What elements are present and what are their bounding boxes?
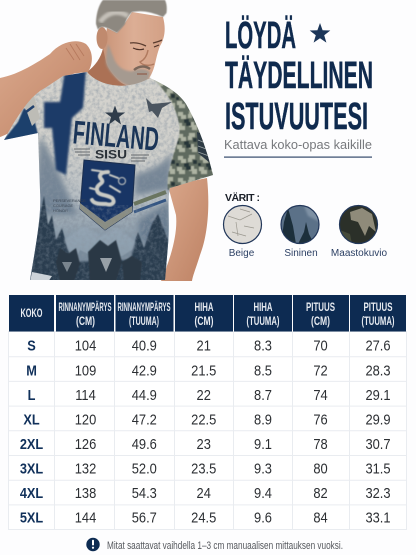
length cm column: 70 (313, 337, 328, 354)
size column: 4XL (20, 484, 44, 501)
header labels: (TUUMA) (362, 316, 395, 328)
sleeve cm column: 21 (197, 337, 211, 354)
size column: S (27, 336, 36, 354)
header labels: RINNANYMPÄRYS (118, 301, 171, 314)
size table (8, 295, 406, 530)
size column: 5XL (20, 508, 44, 526)
table body grid (8, 332, 406, 530)
small print (53, 200, 86, 212)
swatch: camouflage (331, 206, 388, 259)
photo: man wearing Finland t-shirt (0, 0, 220, 282)
chest cm column: 120 (75, 411, 96, 428)
chest inch column: 40.9 (132, 337, 157, 354)
wolves (56, 240, 142, 281)
chest cm column: 132 (75, 460, 96, 477)
swatch: camouflage: Maastokuvio (331, 248, 388, 259)
hair (96, 0, 167, 33)
chest cm column: 144 (75, 509, 96, 526)
heraldic lion (90, 170, 126, 205)
title (225, 14, 373, 138)
chest cm column: 104 (75, 337, 96, 354)
length inch column: 29.9 (365, 411, 391, 428)
length inch column: 29.1 (365, 386, 391, 403)
sleeve cm column: 22 (197, 386, 211, 403)
header labels: KOKO (20, 308, 43, 320)
ear (96, 27, 108, 49)
chest inch column: 44.9 (132, 386, 157, 403)
subtitle: Kattava koko-opas kaikille (224, 137, 372, 152)
sleeve cm column: 24.5 (191, 509, 216, 526)
size column: XL (23, 410, 40, 428)
size column: 3XL (20, 459, 44, 477)
chevron stripes on shirt (134, 192, 166, 204)
footnote: Mitat saattavat vaihdella 1–3 cm manuaalisen mittauksen vuoksi. (107, 540, 343, 552)
header labels: (TUUMA) (246, 316, 280, 328)
sleeve cm column (191, 337, 216, 526)
header labels: (CM) (76, 316, 95, 328)
sleeve cm column: 23 (197, 435, 211, 452)
FINLAND print: FINLAND (72, 113, 160, 158)
length inch column: 27.6 (365, 337, 391, 354)
sleeve cm column: 23.5 (191, 460, 216, 477)
chest cm column: 109 (75, 362, 96, 379)
length cm column: 80 (313, 460, 328, 477)
cloudy blue shading (34, 135, 172, 245)
chest inch column: 47.2 (132, 411, 157, 428)
length cm column: 74 (313, 386, 328, 403)
sleeve cm column: 21.5 (191, 362, 216, 379)
right arm (161, 178, 208, 281)
header labels: RINNANYMPÄRYS (58, 301, 112, 314)
icon: exclamation mark (86, 538, 100, 551)
head (103, 12, 165, 88)
blue cross stripes (44, 70, 86, 175)
sleeve inch column: 9.6 (254, 509, 272, 526)
length cm column: 78 (313, 435, 328, 452)
chest inch column: 49.6 (132, 435, 157, 452)
header labels: (TUUMA) (129, 316, 159, 328)
star (105, 106, 125, 124)
sleeve inch column: 9.4 (254, 484, 272, 501)
beard (106, 44, 150, 88)
swatch: blue (281, 206, 320, 259)
icon: star (310, 23, 330, 43)
SISU print: SISU (95, 148, 127, 162)
small print: HONOR (53, 208, 68, 213)
sleeve inch column: 9.3 (254, 460, 272, 477)
sleeve inch column (254, 337, 272, 526)
sleeve inch column: 9.1 (254, 435, 272, 452)
colours heading: VÄRIT : (225, 191, 260, 204)
chest inch column: 56.7 (132, 509, 157, 526)
swatch: blue: Sininen (284, 248, 318, 259)
length cm column (313, 337, 328, 526)
swatch: beige: Beige (229, 248, 255, 259)
small print: COURAGE (53, 203, 74, 208)
chest cm column: 114 (75, 386, 96, 403)
title: LÖYDÄ (225, 14, 296, 57)
table header (9, 295, 406, 332)
chest cm column (75, 337, 96, 526)
chest cm column: 126 (75, 435, 96, 452)
nose shadow (140, 50, 154, 65)
neck (87, 48, 150, 87)
length inch column: 32.3 (365, 484, 391, 501)
swatch: beige (224, 206, 262, 259)
size column: 2XL (20, 435, 44, 452)
sleeve inch column: 8.3 (254, 337, 272, 354)
camouflage sleeve (153, 80, 213, 190)
sleeve inch column: 8.9 (254, 411, 272, 428)
header labels: HIHA (254, 302, 272, 314)
forest (30, 196, 168, 282)
shield (80, 160, 135, 230)
small print: PERSEVERANCE (53, 198, 86, 203)
sleeve cm column: 22.5 (191, 411, 216, 428)
length cm column: 72 (313, 362, 328, 379)
length inch column: 28.3 (365, 362, 391, 379)
chest inch column (132, 337, 157, 526)
t-shirt (0, 70, 220, 282)
length cm column: 76 (313, 411, 328, 428)
header labels: PITUUS (306, 302, 335, 314)
length cm column: 82 (313, 484, 328, 501)
length inch column: 30.7 (365, 435, 391, 452)
size column: M (26, 361, 37, 379)
moustache and mouth (134, 66, 150, 70)
length inch column: 33.1 (365, 509, 391, 526)
length cm column: 84 (313, 509, 328, 526)
eyes and brows (130, 40, 162, 46)
sleeve inch column: 8.5 (254, 362, 272, 379)
sleeve inch column: 8.7 (254, 386, 272, 403)
raised arm and hand (0, 41, 92, 137)
chest inch column: 52.0 (132, 460, 157, 477)
length inch column: 31.5 (365, 460, 391, 477)
header labels: HIHA (194, 302, 214, 314)
size column (20, 336, 44, 526)
texture (4, 72, 198, 237)
chest inch column: 54.3 (132, 484, 157, 501)
fighter jet (146, 98, 172, 118)
chest inch column: 42.9 (132, 362, 157, 379)
size column: L (28, 386, 36, 403)
header labels (20, 301, 395, 328)
header labels: PITUUS (364, 302, 393, 314)
header labels: (CM) (194, 316, 214, 328)
header labels: (CM) (311, 316, 330, 328)
length inch column (365, 337, 391, 526)
chest cm column: 138 (75, 484, 96, 501)
sleeve cm column: 24 (197, 484, 211, 501)
